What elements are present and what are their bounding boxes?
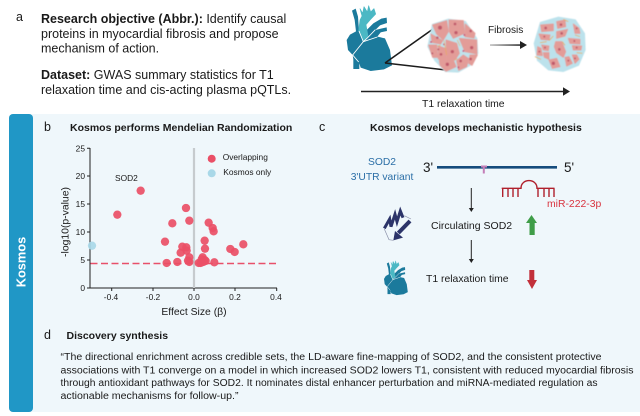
mechanism diagram — [351, 157, 602, 295]
icon: healthy tissue — [427, 19, 478, 73]
legend — [208, 152, 272, 177]
vertical zero line — [193, 148, 195, 288]
panel: Kosmos side tab — [9, 114, 33, 412]
x tick labels: 0.0 — [188, 292, 200, 302]
legend: Kosmos only — [223, 167, 272, 177]
y tick labels: 10 — [76, 227, 85, 237]
icon: fibrotic tissue — [534, 17, 586, 72]
SOD2 variant label: SOD2 — [368, 157, 396, 168]
arrow: down red — [527, 270, 537, 289]
legend: Overlapping — [223, 152, 268, 162]
SOD2 variant label: 3'UTR variant — [351, 172, 413, 183]
arrow: fibrosis — [490, 44, 521, 46]
label a: a — [16, 10, 23, 24]
illustration: heart and fibrosis — [347, 6, 586, 110]
dataset text: relaxation time and cis-acting plasma pQTLs. — [41, 83, 291, 97]
text: through antioxidant pathways for SOD2. It nominates distal enhancer perturbation and miRNA-mediated regulation as — [60, 378, 598, 389]
text: actionable mechanisms for follow-up.” — [60, 391, 238, 402]
x tick labels: -0.2 — [146, 292, 161, 302]
heading: c: Kosmos develops mechanistic hypothesis — [370, 122, 582, 134]
label: Circulating SOD2: Circulating SOD2 — [431, 220, 512, 232]
label d: d — [44, 328, 51, 342]
arrow: variant to circulating SOD2 — [470, 188, 472, 209]
icon: protein — [384, 211, 411, 240]
volcano plot — [60, 143, 282, 318]
arrow: up green — [526, 215, 537, 235]
heading: d: Discovery synthesis — [66, 330, 168, 342]
y tick labels: 25 — [76, 143, 85, 153]
axes — [87, 148, 277, 291]
icon: small heart — [384, 261, 408, 295]
5 prime label: 5' — [564, 160, 574, 175]
threshold line — [90, 262, 277, 264]
data points — [88, 186, 247, 267]
synthesis quote: “The directional enrichment across credible sets, the LD-aware fine-mapping of SOD2, and the consistent protective — [60, 352, 602, 363]
y tick labels: 15 — [76, 199, 85, 209]
x tick labels: -0.4 — [104, 292, 119, 302]
miR label: miR-222-3p — [547, 199, 602, 210]
y tick labels — [76, 143, 85, 293]
RNA strand — [437, 166, 557, 169]
dataset text: Dataset: GWAS summary statistics for T1 — [41, 68, 274, 82]
y tick labels: 5 — [80, 255, 85, 265]
panel: Kosmos background — [9, 114, 640, 412]
panel: Kosmos side tab: Kosmos — [14, 237, 28, 287]
label: Fibrosis: Fibrosis — [488, 25, 523, 36]
heading: b: Kosmos performs Mendelian Randomization — [70, 122, 292, 134]
x axis title: Effect Size (β) — [161, 307, 227, 318]
icon: miRNA — [502, 181, 554, 197]
x tick labels: 0.2 — [229, 292, 241, 302]
zoom lines from heart to tissue — [385, 29, 446, 70]
y tick labels: 0 — [80, 283, 85, 293]
x tick labels — [104, 292, 282, 302]
label b: b — [44, 120, 51, 134]
research objective text: Research objective (Abbr.): Identify causal — [41, 12, 286, 26]
y tick labels: 20 — [76, 171, 85, 181]
3 prime label: 3' — [423, 160, 433, 175]
label: T1 relaxation time: T1 relaxation time — [426, 274, 509, 285]
research objective text: proteins in myocardial fibrosis and propose — [41, 27, 279, 41]
arrow: SOD2 to T1 — [470, 240, 472, 260]
label: T1 relaxation time: T1 relaxation time — [422, 99, 505, 110]
y axis title: -log10(p-value) — [60, 187, 72, 257]
variant marker — [481, 166, 487, 174]
text: associations with T1 converge on a model in which increased SOD2 lowers T1, consistent with reduced myocardial fibrosis — [60, 366, 634, 376]
x tick labels: 0.4 — [270, 292, 282, 302]
arrow: T1 axis — [361, 90, 564, 92]
label c: c — [319, 120, 325, 134]
SOD2 label: SOD2 — [115, 173, 138, 183]
research objective text: mechanism of action. — [41, 42, 159, 56]
icon: heart — [347, 6, 392, 71]
